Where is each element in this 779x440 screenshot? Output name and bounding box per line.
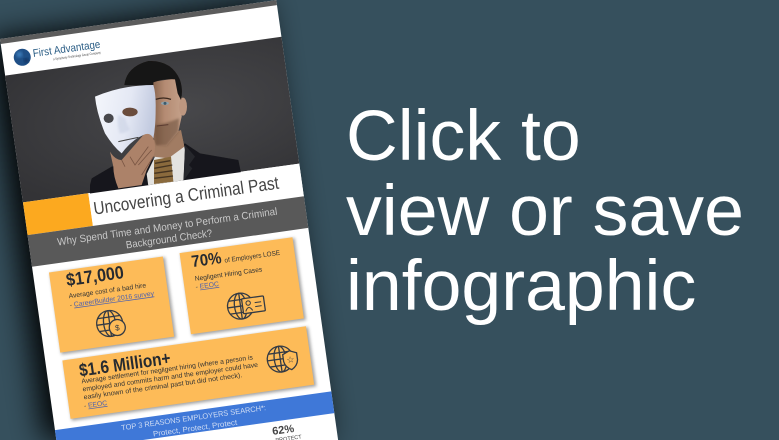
description: Average cost of a bad hire (68, 282, 147, 300)
card shadows (50, 238, 316, 421)
infographic preview (0, 0, 343, 440)
ear (181, 98, 187, 116)
tagline: a Symphony Technology Group Company (53, 51, 101, 61)
hand (110, 134, 155, 188)
card: 70% (180, 237, 304, 334)
call to action text: Click to (346, 96, 581, 176)
banner line 1: TOP 3 REASONS EMPLOYERS SEARCH*: (121, 403, 267, 432)
icon: globe with shield: ☆ (286, 354, 295, 365)
hair (124, 61, 182, 100)
subtitle band (28, 196, 308, 267)
company name: First Advantage (32, 39, 101, 60)
description: Average settlement for negligent hiring (where a person is (81, 354, 254, 385)
logo: First Advantage (13, 38, 102, 67)
mouth (157, 125, 168, 126)
icon: globe with shield (266, 344, 299, 374)
mask mouth (118, 137, 138, 142)
description: employed and commits harm and the employer could have (82, 362, 259, 393)
hero photo: man holding mask (90, 61, 242, 197)
photo background (5, 37, 299, 202)
top bar (0, 0, 277, 44)
description: Negligent Hiring Cases (194, 266, 263, 283)
mask eyes (122, 108, 138, 116)
page shadow (0, 1, 328, 440)
rotated infographic page (0, 0, 343, 440)
title background (88, 164, 304, 226)
eyebrow (156, 98, 171, 99)
subtitle line 1: Why Spend Time and Money to Perform a Criminal (57, 207, 278, 248)
face (153, 78, 182, 146)
stat: 62% protect (271, 422, 303, 440)
lapel (184, 145, 195, 181)
shirt (147, 135, 185, 186)
mask (95, 85, 156, 153)
call to action text: view or save (346, 171, 744, 251)
eye (161, 102, 169, 105)
card: $1.6 Million+ (62, 326, 314, 419)
source: - EEOC (84, 400, 108, 410)
description: easily known of the criminal past but did not check). (83, 372, 243, 401)
banner line 2: Protect, Protect, Protect (152, 418, 239, 439)
stat: 70% (190, 249, 223, 271)
neck (153, 130, 184, 158)
stat: $1.6 Million+ (78, 348, 172, 381)
orange accent (23, 193, 93, 235)
description (81, 354, 260, 401)
tie (154, 157, 173, 184)
call to action text (346, 96, 744, 326)
blue banner (55, 391, 334, 440)
source: - EEOC (195, 281, 219, 291)
subtitle line 2: Background Check? (125, 228, 213, 251)
page background (0, 0, 343, 440)
call to action text: infographic (346, 246, 696, 326)
stat: 62% protect: 62% (271, 423, 295, 438)
mask nose shading (118, 116, 128, 133)
stat: $17,000 (65, 262, 125, 290)
source: - CareerBuilder 2016 survey (69, 290, 155, 309)
title band (23, 164, 304, 235)
logo globe (13, 48, 32, 67)
card: $17,000 (49, 256, 174, 353)
icon: globe with ID card (226, 290, 266, 321)
icon: globe with dollar: $ (115, 323, 121, 333)
suit (90, 143, 242, 197)
title: Uncovering a Criminal Past (92, 173, 280, 219)
stat label: of Employers LOSE (224, 250, 281, 265)
beard (154, 118, 179, 146)
